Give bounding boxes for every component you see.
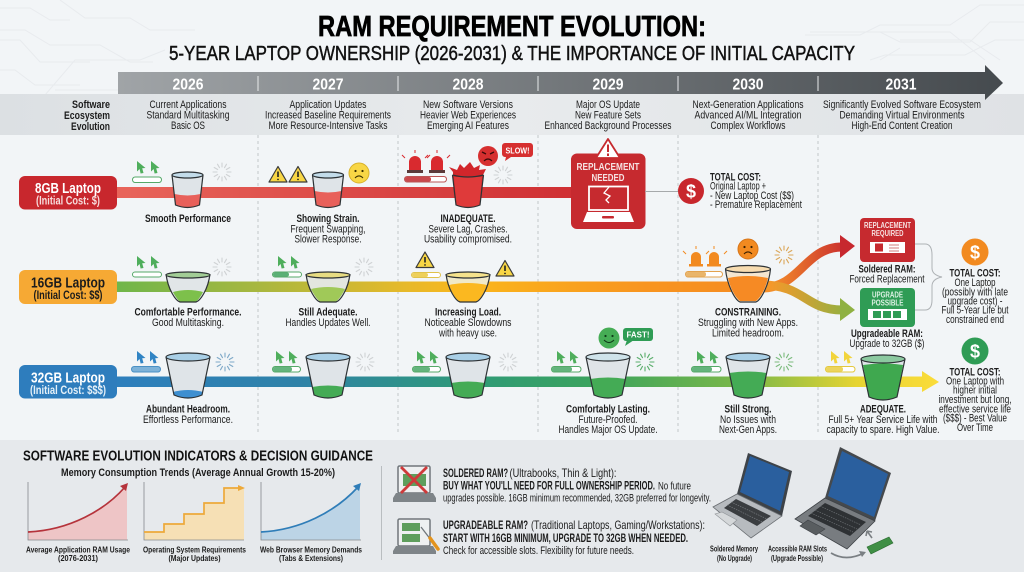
total cost: 16GB: $ — [970, 242, 980, 262]
software ecosystem text by year: High-End Content Creation — [852, 120, 952, 132]
16GB label — [19, 270, 117, 304]
total cost: 16GB: upgrade cost) - — [948, 296, 1003, 308]
2030 status: constraining — [683, 239, 798, 340]
2026 status: comfortable — [132, 256, 242, 329]
software ecosystem text by year: Major OS Update — [576, 99, 640, 111]
guidance: soldered RAM — [443, 466, 711, 504]
speech bubble: fast: FAST! — [626, 330, 650, 340]
chart: operating system requirements: Operating System Requirements — [143, 544, 246, 554]
replacement required badge: REQUIRED — [872, 229, 904, 238]
upgrade possible badge: UPGRADE — [872, 290, 904, 300]
row heading: software ecosystem evolution: Evolution — [71, 121, 110, 133]
total cost: 8GB — [678, 172, 802, 211]
16GB label: 16GB Laptop — [31, 276, 105, 292]
chart: operating system requirements — [143, 482, 246, 563]
2028 status: increasing load: Noticeable Slowdowns — [424, 317, 512, 329]
column dividers — [258, 135, 818, 432]
guidance: upgradeable RAM: UPGRADEABLE RAM? — [443, 518, 528, 532]
row heading: software ecosystem evolution: Ecosystem — [64, 110, 110, 122]
total cost: 16GB: constrained end — [946, 314, 1004, 326]
16GB track — [19, 218, 1008, 350]
2027 status: showing strain: Frequent Swapping, — [290, 224, 366, 236]
replacement required badge: REPLACEMENT — [864, 221, 911, 230]
software ecosystem text by year: Application Updates — [290, 99, 367, 111]
total cost: 8GB: $ — [686, 182, 696, 202]
2026 status: comfortable: Comfortable Performance. — [134, 306, 242, 318]
2030 status: still strong: Still Strong. — [724, 404, 772, 416]
illustration: soldered laptop: (No Upgrade) — [717, 553, 752, 563]
8GB label: (Initial Cost: $) — [36, 196, 100, 208]
2030 status: constraining: Struggling with New Apps. — [698, 317, 798, 329]
total cost: 16GB — [942, 238, 1008, 326]
2027 status: adequate: Still Adequate. — [298, 306, 358, 318]
illustration: soldered laptop — [710, 453, 792, 563]
2030 status: still strong: No Issues with — [720, 414, 776, 426]
software ecosystem text by year: Basic OS — [171, 120, 205, 132]
16GB bar — [117, 282, 767, 292]
2031 status: adequate: capacity to spare. High Value. — [826, 424, 940, 436]
row heading: software ecosystem evolution: Software — [72, 99, 110, 111]
32GB label: (Initial Cost: $$$) — [30, 385, 106, 397]
icon: RAM stick with arrows — [831, 531, 893, 558]
2026 status: abundant headroom: Effortless Performance. — [143, 414, 233, 426]
replacement required badge — [860, 218, 915, 262]
chart: browser memory demands: Web Browser Memory Demands — [260, 544, 362, 554]
title: 5-YEAR LAPTOP OWNERSHIP (2026-2031) & THE IMPORTANCE OF INITIAL CAPACITY — [169, 43, 855, 65]
2028 status: increasing load — [412, 252, 514, 340]
panel: software evolution indicators and decision guidance — [0, 440, 1024, 572]
timeline arrow: 2031 — [886, 76, 917, 94]
software ecosystem text by year: Enhanced Background Processes — [544, 120, 672, 132]
2029 status: comfortably lasting: Comfortably Lasting. — [566, 404, 650, 416]
speech bubble: slow: SLOW! — [506, 146, 530, 156]
fork arrow: upgradeable — [762, 285, 855, 321]
8GB bar — [117, 187, 575, 198]
software ecosystem text by year: Increased Baseline Requirements — [265, 110, 391, 122]
2026 status: abundant headroom: Abundant Headroom. — [146, 404, 230, 416]
8GB track — [19, 139, 802, 246]
2026 status: smooth: Smooth Performance — [145, 213, 231, 225]
timeline arrow: 2027 — [312, 76, 344, 94]
timeline arrow: 2030 — [732, 76, 764, 94]
2028 status — [412, 351, 517, 398]
replacement needed badge — [571, 139, 646, 229]
2027 status: showing strain: Showing Strain. — [296, 213, 360, 225]
chart: operating system requirements: (Major Updates) — [168, 553, 221, 563]
32GB label — [19, 365, 117, 398]
replacement needed badge: REPLACEMENT — [576, 162, 640, 173]
illustration: soldered laptop: Soldered Memory — [710, 544, 758, 554]
total cost: 16GB: One Laptop — [954, 277, 996, 289]
2030 status: still strong — [692, 351, 793, 436]
2028 status: inadequate: Usability compromised. — [424, 234, 512, 246]
total cost: 8GB: - New Laptop Cost ($$) — [710, 190, 794, 202]
2027 status: showing strain: Slower Response. — [294, 234, 362, 246]
illustration: upgradeable laptop: (Upgrade Possible) — [771, 553, 823, 563]
timeline arrow: 2026 — [172, 76, 204, 94]
total cost: 8GB: - Premature Replacement — [710, 199, 802, 211]
total cost: 16GB: TOTAL COST: — [950, 268, 1000, 280]
2030 status: constraining: CONSTRAINING. — [715, 306, 781, 318]
2026 status: comfortable: Good Multitasking. — [152, 317, 224, 329]
software ecosystem text by year: Heavier Web Experiences — [420, 110, 516, 122]
icon: upgradeable RAM with screwdriver — [393, 519, 438, 554]
illustration: upgradeable laptop: Accessible RAM Slots — [768, 544, 827, 554]
2031 status: adequate: Full 5+ Year Service Life with — [828, 414, 938, 426]
timeline arrow: 2029 — [592, 76, 624, 94]
upgradeable RAM caption: Upgrade to 32GB ($) — [850, 338, 924, 350]
2031 status: adequate — [826, 351, 940, 436]
software ecosystem text by year: Demanding Virtual Environments — [840, 110, 965, 122]
guidance: upgradeable RAM — [443, 518, 705, 557]
total cost: 8GB: Original Laptop + — [710, 180, 766, 192]
chart: browser memory demands — [260, 482, 362, 563]
2027 status: showing strain — [269, 163, 369, 246]
panel heading: SOFTWARE EVOLUTION INDICATORS & DECISION GUIDANCE — [23, 448, 373, 464]
illustration: upgradeable laptop — [768, 447, 891, 563]
row heading: software ecosystem evolution — [64, 99, 110, 133]
2030 status: constraining: Limited headroom. — [712, 328, 784, 340]
guidance: upgradeable RAM: START WITH 16GB MINIMUM, UPGRADE TO 32GB WHEN NEEDED. — [443, 531, 688, 545]
2027 status: adequate — [272, 256, 373, 329]
guidance: upgradeable RAM: (Traditional Laptops, Gaming/Workstations): — [531, 518, 705, 532]
guidance: upgradeable RAM: Check for accessible slots. Flexibility for future needs. — [443, 545, 634, 557]
software ecosystem text by year: New Software Versions — [423, 99, 513, 111]
software ecosystem text by year: Standard Multitasking — [146, 110, 230, 122]
chart: application RAM usage: (2076-2031) — [58, 553, 98, 563]
32GB track — [19, 328, 1012, 436]
icon: soldered RAM crossed out — [393, 466, 436, 502]
2027 status — [272, 351, 374, 398]
software ecosystem text by year — [146, 99, 981, 132]
total cost: 32GB: Over Time — [957, 422, 993, 434]
bracket to total cost — [915, 244, 942, 310]
software ecosystem text by year: Emerging AI Features — [427, 120, 509, 132]
2026 status: smooth — [132, 161, 231, 225]
2028 status: increasing load: with heavy use. — [438, 328, 497, 340]
32GB bar and arrow — [117, 371, 939, 392]
total cost: 32GB: TOTAL COST: — [950, 366, 1000, 378]
2026 status: abundant headroom — [132, 351, 234, 426]
circuit pattern: top right — [805, 5, 1024, 60]
chart: application RAM usage: Average Application RAM Usage — [26, 544, 130, 554]
chart: application RAM usage — [26, 482, 130, 563]
chart: browser memory demands: (Tabs & Extensions) — [279, 553, 343, 563]
title: RAM REQUIREMENT EVOLUTION: — [318, 11, 706, 43]
2029 status: comfortably lasting: Handles Major OS Update. — [558, 424, 658, 436]
2028 status: inadequate: INADEQUATE. — [440, 213, 496, 225]
software ecosystem text by year: Complex Workflows — [710, 120, 786, 132]
2027 status: adequate: Handles Updates Well. — [286, 317, 370, 329]
trends subheading: Memory Consumption Trends (Average Annual Growth 15-20%) — [61, 467, 335, 479]
timeline arrow — [118, 65, 1003, 100]
soldered RAM caption — [850, 264, 924, 286]
software ecosystem text by year: Significantly Evolved Software Ecosystem — [823, 99, 981, 111]
total cost: 8GB: TOTAL COST: — [710, 172, 761, 184]
guidance: soldered RAM: (Ultrabooks, Thin & Light): — [510, 466, 616, 480]
2028 status: inadequate — [402, 143, 533, 246]
total cost: 32GB: $ — [970, 342, 980, 362]
software ecosystem text by year: Next-Generation Applications — [692, 99, 804, 111]
software ecosystem text by year: New Feature Sets — [575, 110, 641, 122]
software ecosystem text by year: Current Applications — [150, 99, 227, 111]
timeline arrow: 2028 — [452, 76, 484, 94]
software ecosystem text by year: More Resource-Intensive Tasks — [268, 120, 388, 132]
total cost: 32GB: One Laptop with — [946, 376, 1004, 388]
2030 status: still strong: Next-Gen Apps. — [719, 424, 777, 436]
guidance: soldered RAM: No future — [658, 480, 691, 492]
32GB label: 32GB Laptop — [31, 370, 105, 386]
upgradeable RAM caption — [850, 328, 924, 350]
16GB label: (Initial Cost: $$) — [34, 290, 103, 302]
8GB label: 8GB Laptop — [35, 181, 101, 197]
title — [169, 11, 855, 65]
soldered RAM caption: Forced Replacement — [850, 274, 924, 286]
2029 status: comfortably lasting — [552, 328, 658, 436]
circuit pattern: top left — [0, 0, 195, 95]
total cost: 32GB — [938, 338, 1012, 434]
guidance: soldered RAM: SOLDERED RAM? — [443, 466, 508, 480]
2031 status: adequate: ADEQUATE. — [860, 404, 906, 416]
upgrade possible badge: POSSIBLE — [872, 298, 904, 308]
connector to total cost — [645, 190, 680, 192]
2028 status: inadequate: Severe Lag, Crashes. — [428, 224, 508, 236]
software ecosystem text by year: Advanced AI/ML Integration — [694, 110, 802, 122]
guidance: soldered RAM: upgrades possible. 16GB minimum recommended, 32GB preferred for longevity. — [443, 492, 711, 504]
total cost: 32GB: higher initial — [953, 384, 997, 396]
fork arrow: soldered — [762, 235, 855, 288]
2029 status: comfortably lasting: Future-Proofed. — [578, 414, 638, 426]
soldered RAM caption: Soldered RAM: — [858, 264, 916, 276]
software ecosystem band — [0, 94, 1024, 135]
upgrade possible badge — [860, 288, 915, 327]
guidance: soldered RAM: BUY WHAT YOU'LL NEED FOR FULL OWNERSHIP PERIOD. — [443, 478, 655, 492]
2028 status: increasing load: Increasing Load. — [435, 306, 501, 318]
upgradeable RAM caption: Upgradeable RAM: — [851, 328, 923, 340]
replacement needed badge: NEEDED — [592, 173, 624, 184]
8GB label — [19, 176, 117, 210]
